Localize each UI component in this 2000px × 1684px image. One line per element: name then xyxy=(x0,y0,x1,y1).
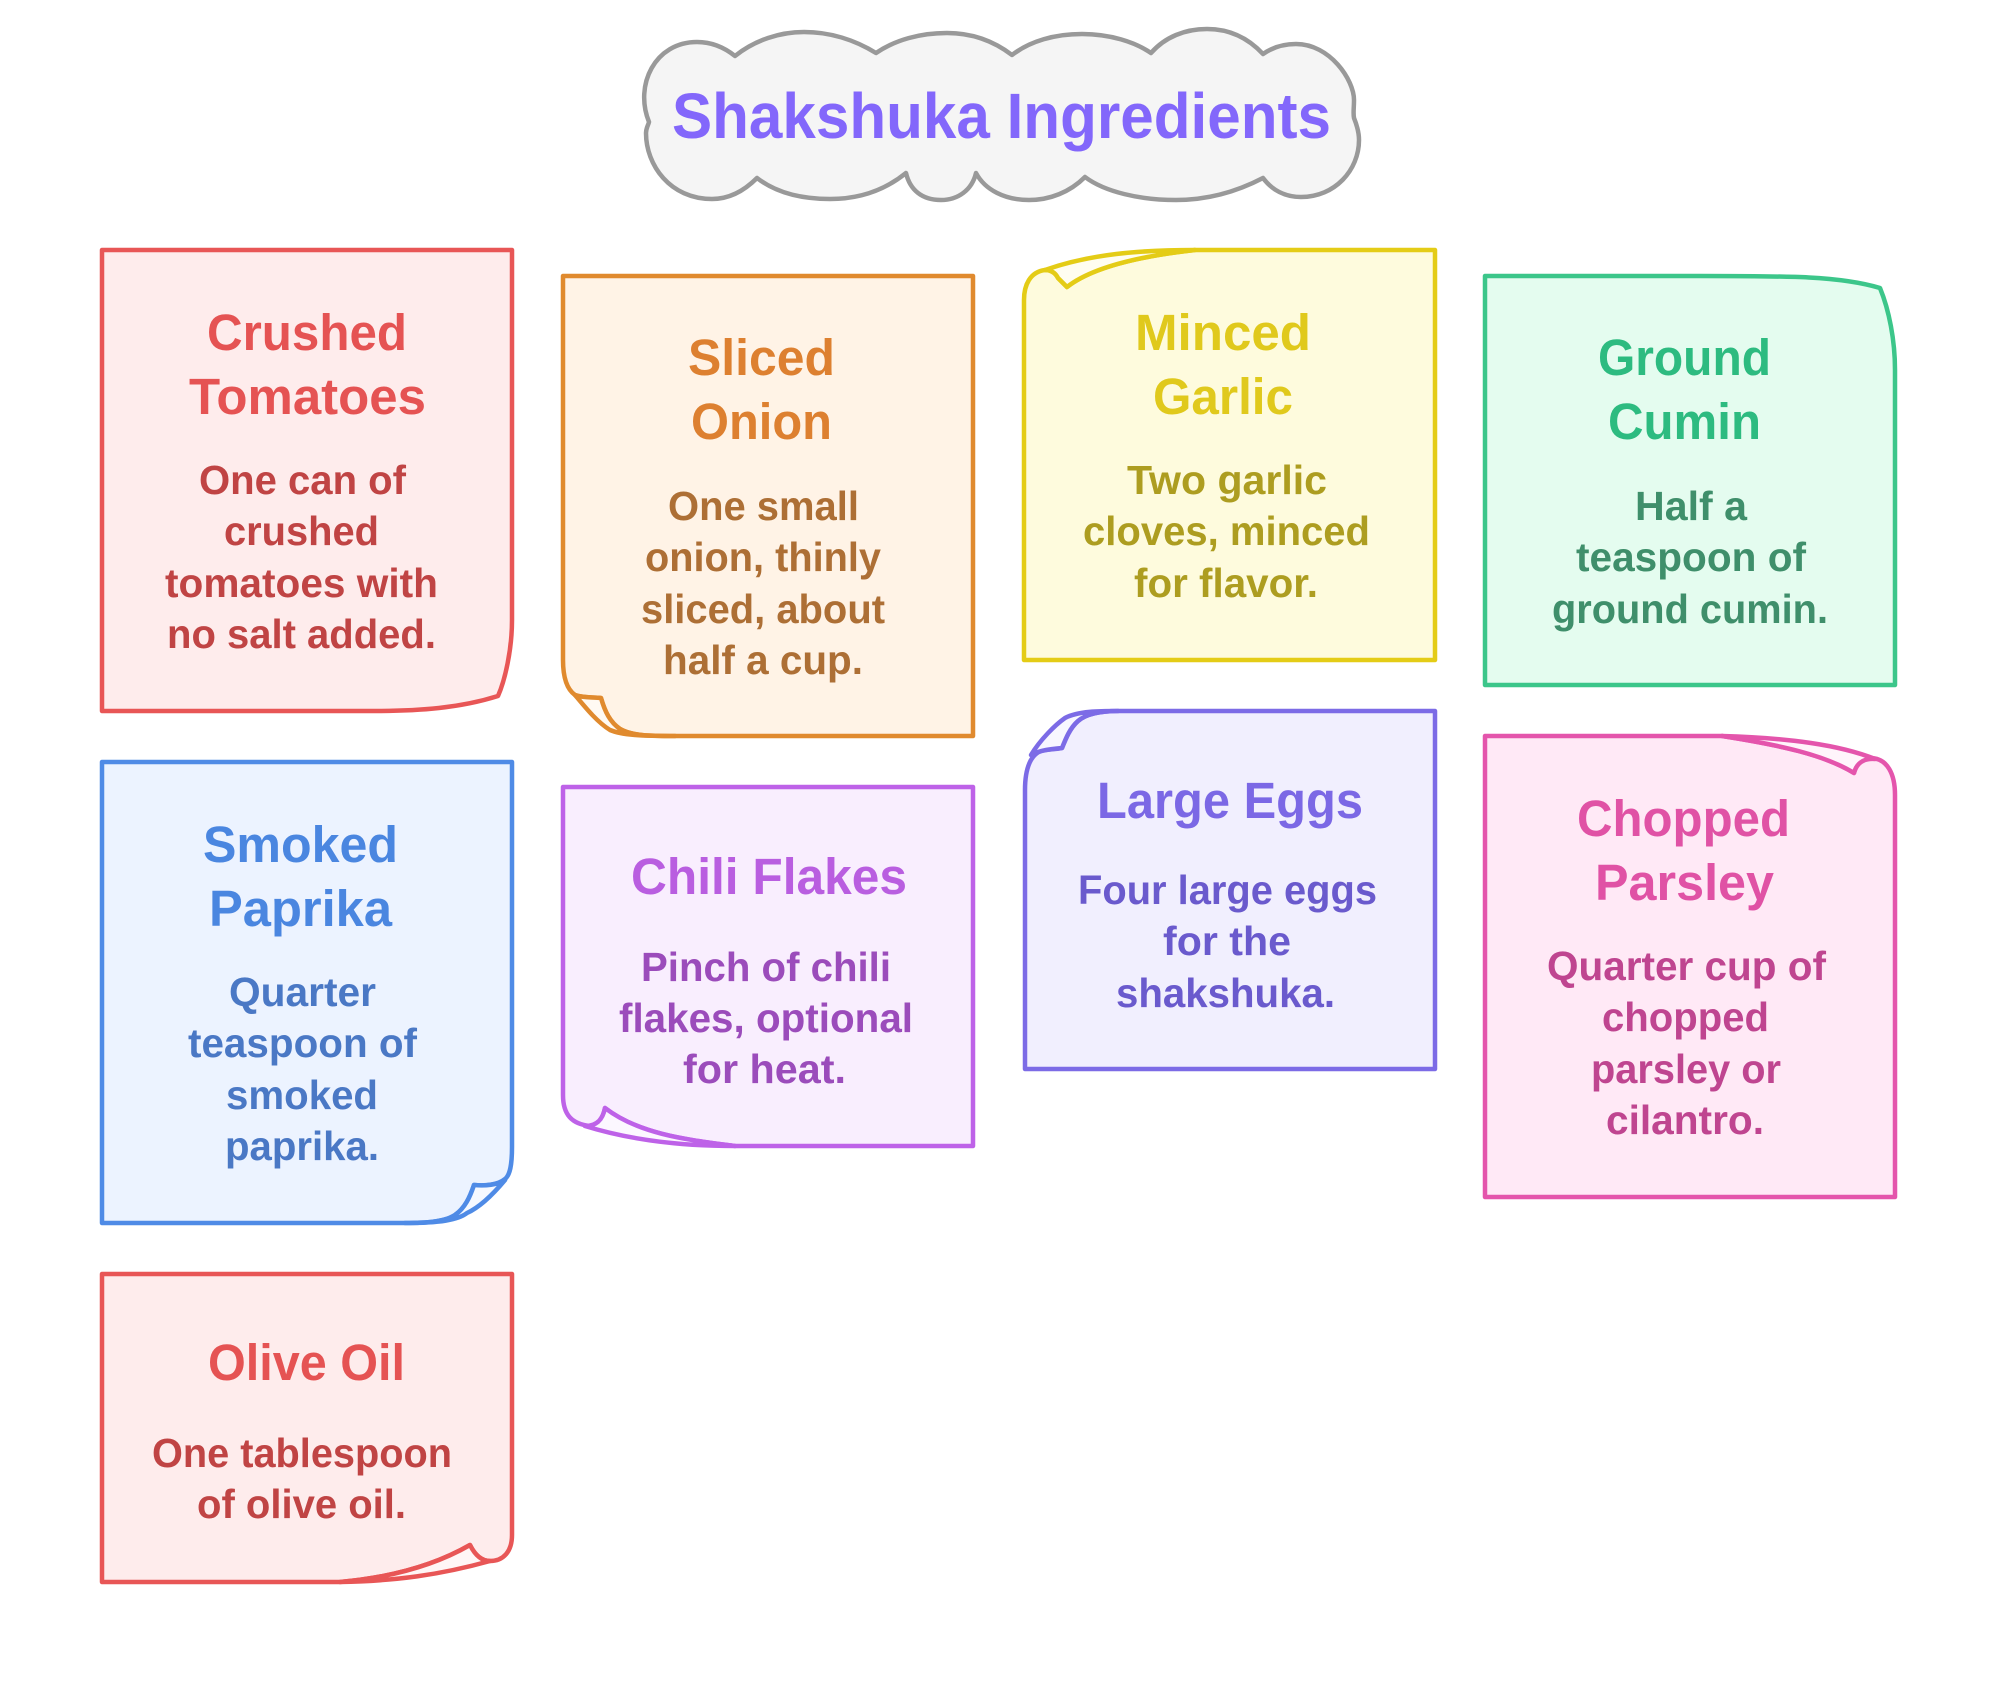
description: crushed xyxy=(224,508,379,554)
description xyxy=(1078,867,1377,1016)
description: paprika. xyxy=(225,1123,379,1169)
description xyxy=(152,1430,452,1527)
card: Large Eggs xyxy=(1025,711,1435,1069)
card: Ground Cumin xyxy=(1485,276,1895,685)
heading: Chili Flakes xyxy=(631,848,907,905)
heading xyxy=(688,329,835,450)
description: Quarter cup of xyxy=(1547,943,1826,989)
description xyxy=(641,483,885,683)
description: One small xyxy=(668,483,859,529)
description xyxy=(1547,943,1826,1143)
title cloud xyxy=(644,29,1359,200)
heading: Garlic xyxy=(1153,368,1293,425)
description: One can of xyxy=(199,457,406,503)
note shape with curl xyxy=(563,276,973,736)
card: Smoked Paprika xyxy=(102,762,512,1223)
description xyxy=(165,457,438,657)
description: Two garlic xyxy=(1127,457,1327,503)
heading: Tomatoes xyxy=(189,368,426,425)
heading xyxy=(189,304,426,425)
heading: Olive Oil xyxy=(208,1334,405,1391)
card: Crushed Tomatoes xyxy=(102,250,512,711)
description: no salt added. xyxy=(167,611,436,657)
card: Minced Garlic xyxy=(1024,250,1435,660)
description: Four large eggs xyxy=(1078,867,1377,913)
heading xyxy=(1577,790,1790,911)
description: Half a xyxy=(1635,483,1748,529)
note shape with curl xyxy=(1025,711,1435,1069)
description: Pinch of chili xyxy=(641,944,891,990)
heading: Chopped xyxy=(1577,790,1790,847)
description xyxy=(1083,457,1370,606)
description: Quarter xyxy=(229,969,376,1015)
heading xyxy=(1135,304,1311,425)
description: onion, thinly xyxy=(645,534,881,580)
description xyxy=(1552,483,1828,632)
note shape with curl xyxy=(102,762,512,1223)
description: parsley or xyxy=(1591,1046,1781,1092)
heading: Sliced xyxy=(688,329,835,386)
heading: Ground xyxy=(1598,329,1771,386)
heading: Minced xyxy=(1135,304,1311,361)
description: One tablespoon xyxy=(152,1430,452,1476)
card: Chili Flakes xyxy=(563,787,973,1146)
heading xyxy=(203,816,398,937)
description: for heat. xyxy=(683,1046,846,1092)
description: smoked xyxy=(226,1072,378,1118)
description: ground cumin. xyxy=(1552,586,1828,632)
description: teaspoon of xyxy=(1576,534,1806,580)
description: half a cup. xyxy=(663,637,863,683)
note shape with curl xyxy=(102,1274,512,1582)
description: teaspoon of xyxy=(188,1020,417,1066)
heading: Paprika xyxy=(209,880,393,937)
description: for the xyxy=(1163,918,1291,964)
description: cloves, minced xyxy=(1083,508,1370,554)
note shape xyxy=(1485,276,1895,685)
note shape with curl xyxy=(1024,250,1435,660)
heading: Onion xyxy=(691,393,832,450)
heading: Smoked xyxy=(203,816,398,873)
description: sliced, about xyxy=(641,586,885,632)
heading xyxy=(1598,329,1771,450)
title text: Shakshuka Ingredients xyxy=(672,80,1331,152)
heading: Parsley xyxy=(1595,854,1775,911)
description: tomatoes with xyxy=(165,560,438,606)
description xyxy=(619,944,913,1092)
heading: Large Eggs xyxy=(1097,772,1363,829)
card: Olive Oil xyxy=(102,1274,512,1582)
note shape with curl xyxy=(563,787,973,1146)
card: Sliced Onion xyxy=(563,276,973,736)
description: flakes, optional xyxy=(619,995,913,1041)
description: for flavor. xyxy=(1134,560,1318,606)
heading: Cumin xyxy=(1608,393,1761,450)
description xyxy=(188,969,417,1169)
card: Chopped Parsley xyxy=(1485,736,1895,1197)
description: of olive oil. xyxy=(197,1481,406,1527)
note shape xyxy=(102,250,512,711)
description: chopped xyxy=(1602,994,1769,1040)
description: shakshuka. xyxy=(1116,970,1335,1016)
cloud shape xyxy=(644,29,1359,200)
heading: Crushed xyxy=(207,304,407,361)
note shape with curl xyxy=(1485,736,1895,1197)
description: cilantro. xyxy=(1606,1097,1764,1143)
